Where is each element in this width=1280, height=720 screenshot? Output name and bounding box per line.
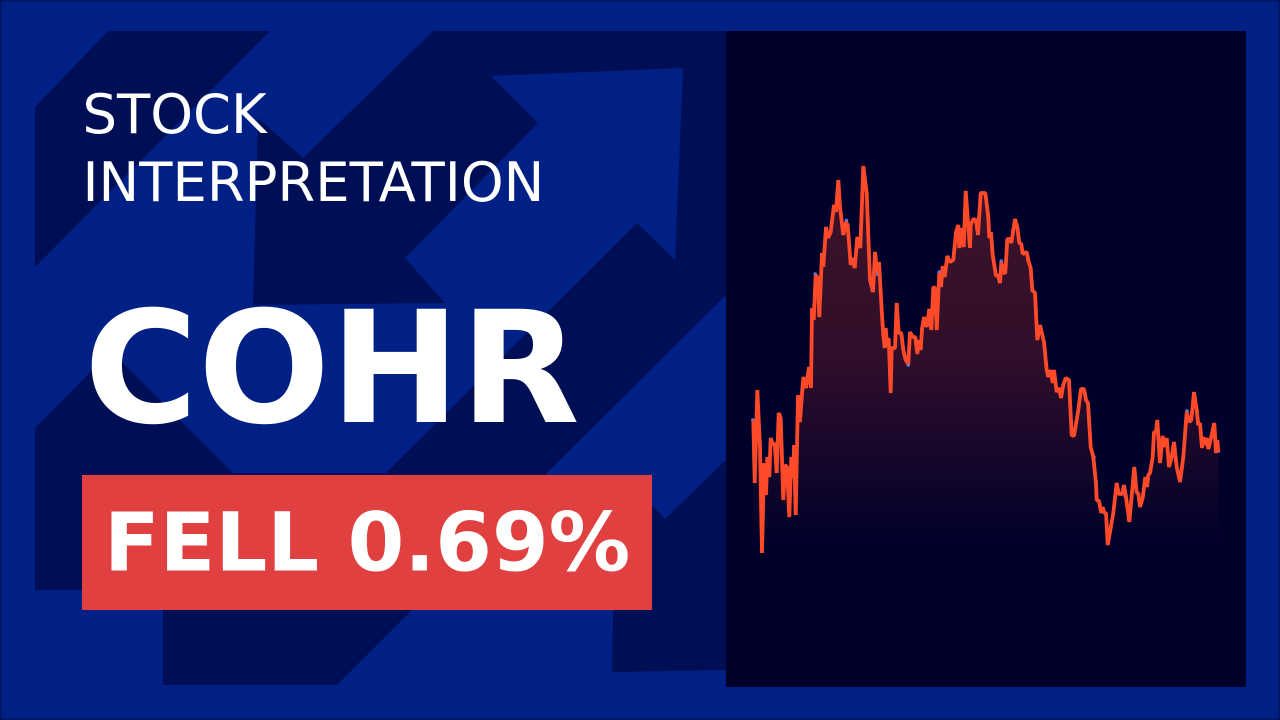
ticker symbol: COHR — [84, 278, 580, 459]
change badge — [82, 475, 652, 610]
change badge: FELL 0.69% — [104, 496, 630, 590]
price markers — [751, 219, 1220, 497]
heading — [82, 83, 544, 214]
price line — [753, 166, 1218, 553]
chart panel — [726, 31, 1246, 687]
background arrows — [35, 31, 730, 685]
area under price line — [753, 166, 1218, 553]
heading: STOCK — [82, 83, 268, 146]
heading: INTERPRETATION — [82, 151, 544, 214]
